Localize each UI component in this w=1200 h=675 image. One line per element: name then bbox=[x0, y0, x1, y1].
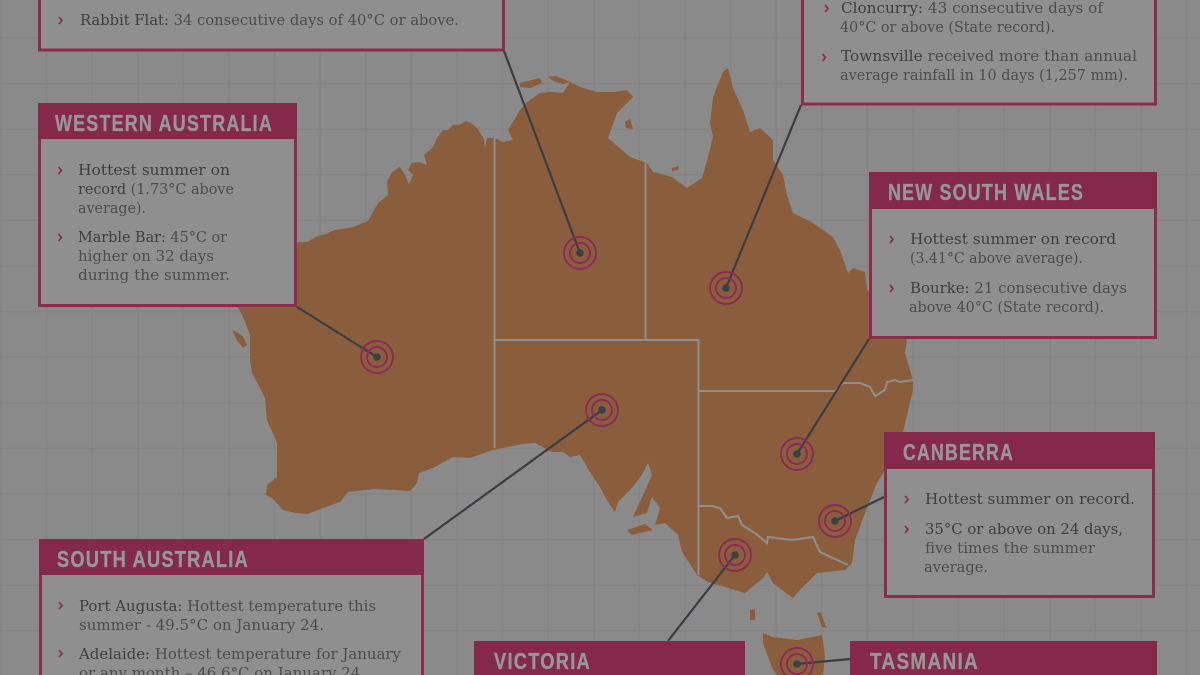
panel: New South Wales: above 40°C (State record). bbox=[909, 298, 1104, 316]
panel: Western Australia: record (1.73°C above bbox=[78, 180, 234, 198]
panel: Victoria: VICTORIA bbox=[494, 648, 591, 674]
panel: New South Wales: NEW SOUTH WALES bbox=[888, 179, 1084, 205]
panel: Western Australia: Marble Bar: 45°C or bbox=[78, 228, 228, 246]
panel: New South Wales: Hottest summer on record bbox=[910, 230, 1116, 248]
heading: New South Wales bbox=[869, 172, 1157, 209]
panel: Canberra: average. bbox=[924, 558, 988, 576]
panel: Canberra: five times the summer bbox=[925, 539, 1096, 557]
panel: South Australia: SOUTH AUSTRALIA bbox=[57, 546, 249, 572]
panel: Western Australia: higher on 32 days bbox=[78, 247, 214, 265]
state borders bbox=[494, 138, 913, 575]
panel: Western Australia: during the summer. bbox=[78, 266, 230, 284]
panel: Western Australia: average). bbox=[78, 199, 146, 217]
panel: Canberra: Hottest summer on record. bbox=[925, 490, 1135, 508]
panel: Queensland: Townsville received more than annual bbox=[841, 47, 1137, 65]
panel: Canberra: CANBERRA bbox=[903, 439, 1014, 465]
panel: Tasmania bbox=[850, 641, 1157, 675]
heading: South Australia bbox=[39, 539, 424, 575]
panel: New South Wales: Bourke: 21 consecutive days bbox=[910, 279, 1127, 297]
panel: Northern Territory bbox=[40, 0, 504, 50]
heading: Canberra bbox=[884, 432, 1155, 469]
panel: South Australia: Port Augusta: Hottest temperature this bbox=[79, 597, 376, 615]
mainland bbox=[238, 68, 913, 598]
panel: Tasmania: TASMANIA bbox=[870, 648, 979, 674]
panel: Queensland: average rainfall in 10 days (1,257 mm). bbox=[840, 66, 1128, 84]
panel: Victoria bbox=[474, 641, 745, 675]
panel: New South Wales bbox=[869, 172, 1157, 338]
connector lines bbox=[297, 51, 884, 664]
panel: Queensland bbox=[802, 0, 1156, 104]
panel: Canberra bbox=[884, 432, 1155, 596]
panel: South Australia: summer - 49.5°C on January 24. bbox=[79, 616, 324, 634]
panel: Queensland: 40°C or above (State record). bbox=[840, 18, 1055, 36]
panel: Canberra: 35°C or above on 24 days, bbox=[925, 520, 1123, 538]
panel: South Australia bbox=[39, 539, 424, 675]
location markers bbox=[361, 237, 851, 675]
panel: New South Wales: (3.41°C above average). bbox=[910, 249, 1083, 267]
heading: Western Australia bbox=[38, 103, 297, 139]
panel: Northern Territory: Rabbit Flat: 34 consecutive days of 40°C or above. bbox=[80, 11, 459, 29]
islands bbox=[232, 76, 828, 675]
panel: Western Australia: WESTERN AUSTRALIA bbox=[55, 110, 273, 136]
panel: Western Australia: Hottest summer on bbox=[78, 161, 230, 179]
map of Australia bbox=[232, 68, 913, 675]
panel: Western Australia bbox=[38, 103, 297, 306]
panel: South Australia: Adelaide: Hottest temperature for January bbox=[78, 645, 402, 663]
